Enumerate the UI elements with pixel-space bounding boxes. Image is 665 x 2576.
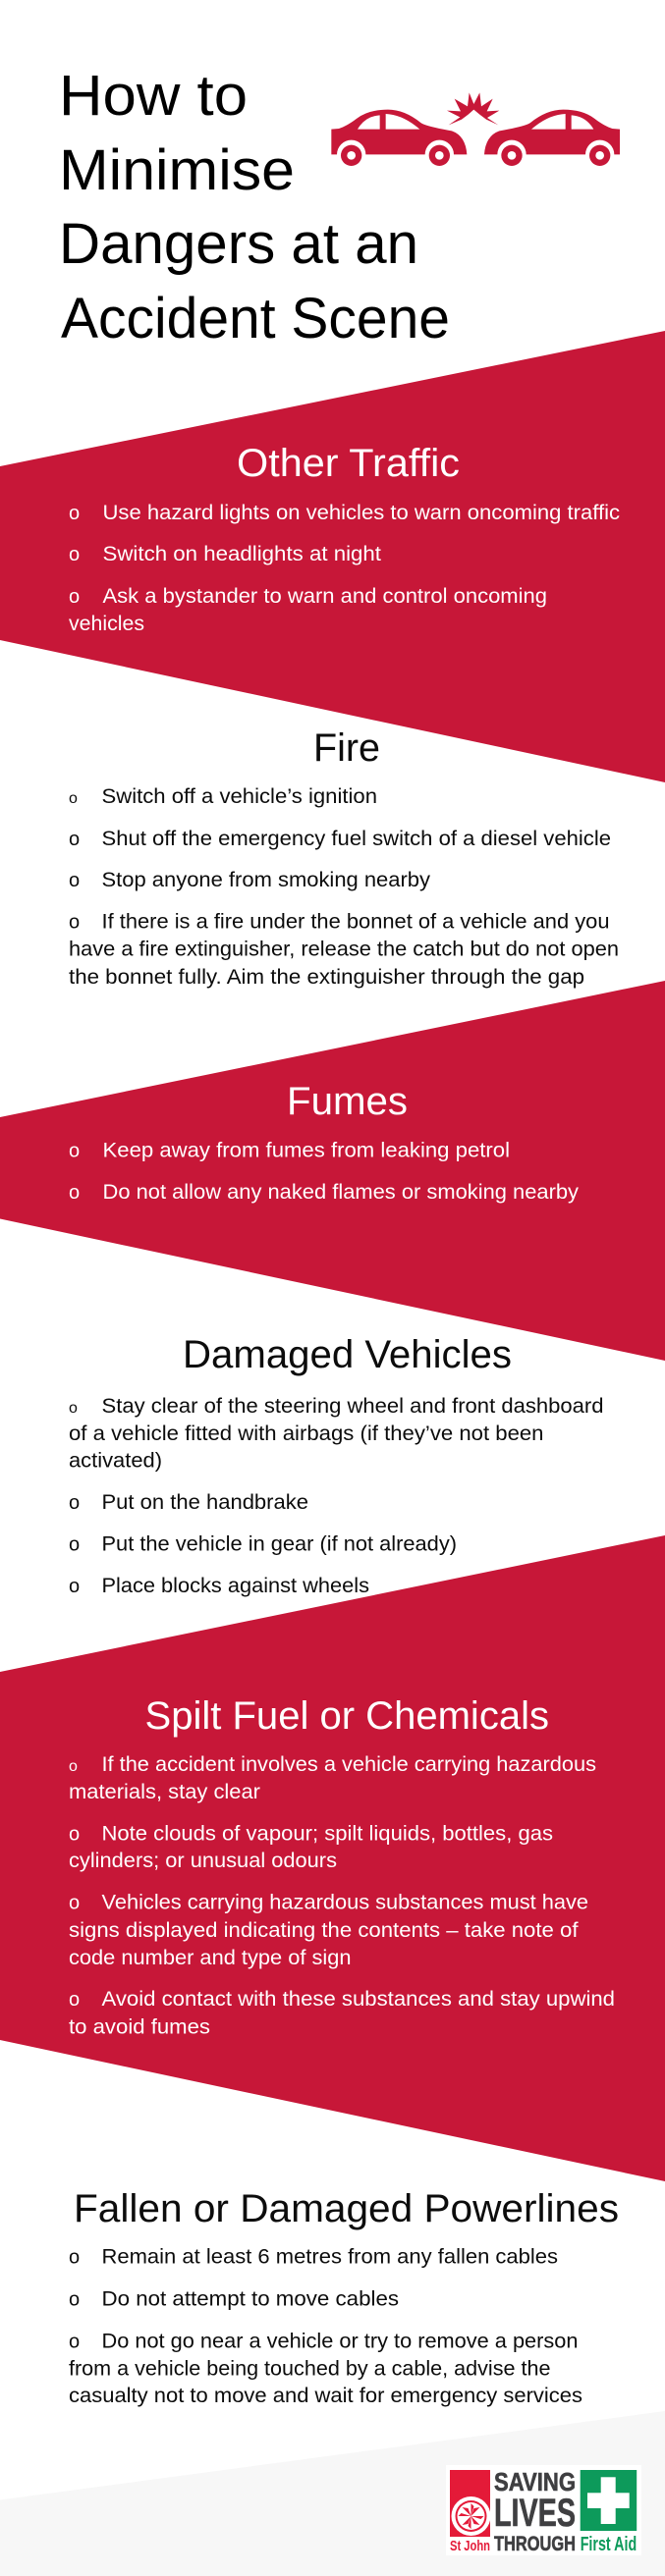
list item: Use hazard lights on vehicles to warn oncoming traffic [102,502,620,524]
list item: If the accident involves a vehicle carrying hazardous [102,1753,596,1776]
list item: o [69,1400,78,1417]
heading: fire: Fire [313,726,380,770]
title: Accident Scene [61,287,450,350]
icon: two cars colliding [331,92,620,166]
list item [69,911,619,989]
panel: fallen or damaged powerlines [69,2187,619,2407]
panel: fire [69,726,619,989]
footer band [0,2411,665,2576]
panel: fumes [0,981,665,1361]
list item: have a fire extinguisher, release the catch but do not open [69,939,619,960]
heading: fallen or damaged powerlines: Fallen or Damaged Powerlines [74,2187,619,2230]
list item: Switch off a vehicle’s ignition [102,785,377,808]
list item: o [69,829,80,850]
heading: damaged vehicles: Damaged Vehicles [183,1333,512,1376]
logo: st john emblem [450,2470,491,2537]
list item: o [69,911,80,933]
list item [69,1988,615,2038]
list item: Remain at least 6 metres from any fallen cables [102,2246,558,2268]
list item: o [69,2289,80,2311]
list item: Vehicles carrying hazardous substances must have [102,1891,588,1914]
logo: first aid cross [581,2470,637,2531]
list item: o [69,503,80,524]
heading: fumes: Fumes [287,1080,408,1123]
icon: left car [331,110,467,166]
list item: o [69,1492,80,1514]
title [59,64,450,350]
logo: tagline: LIVES [494,2492,576,2535]
list item: casualty not to move and wait for emergency services [69,2385,582,2407]
heading: other traffic: Other Traffic [237,442,460,485]
list item: Do not go near a vehicle or try to remove a person [102,2331,578,2352]
icon: right car [484,110,620,166]
list item: o [69,1893,80,1914]
list item: Stay clear of the steering wheel and front dashboard [102,1395,603,1418]
list item: materials, stay clear [69,1781,260,1803]
list item: o [69,544,80,565]
list item: If there is a fire under the bonnet of a vehicle and you [102,911,609,933]
logo: saving lives through first aid [446,2465,641,2555]
list item: activated) [69,1449,162,1473]
logo: tagline: THROUGH [494,2533,576,2555]
logo: first aid label: First Aid [581,2534,637,2555]
list item: o [69,790,78,807]
list item: o [69,1141,80,1162]
list item: Note clouds of vapour; spilt liquids, bottles, gas [102,1822,553,1846]
icon: impact burst [447,92,499,125]
list item: place blocks against wheels: o [69,1576,80,1597]
list item: Switch on headlights at night [102,543,381,565]
list item [69,1753,596,1803]
list item: Ask a bystander to warn and control oncoming [102,585,547,608]
list item: Do not attempt to move cables [102,2287,399,2311]
list item: cylinders; or unusual odours [69,1850,337,1872]
list item: o [69,2246,80,2268]
list item: o [69,1758,78,1775]
list item: o [69,1989,80,2011]
list item: o [69,586,80,608]
list item: Put the vehicle in gear (if not already) [102,1533,457,1555]
logo: tagline [494,2467,576,2555]
title: How to [59,64,248,128]
list item [69,1395,603,1473]
list item: o [69,1182,80,1204]
list item: o [69,1533,80,1555]
list item: place blocks against wheels: Place blocks against wheels [102,1575,369,1597]
list item: vehicles [69,613,144,635]
list item: o [69,870,80,891]
list item [69,1891,588,1969]
list item: o [69,2331,80,2352]
list item: from a vehicle being touched by a cable, advise the [69,2358,550,2380]
list item: Keep away from fumes from leaking petrol [102,1139,510,1162]
list item: Stop anyone from smoking nearby [102,869,431,891]
panel: damaged vehicles [69,1333,603,1555]
list item: Avoid contact with these substances and stay upwind [102,1988,615,2011]
list item [69,1822,553,1872]
list item [69,585,547,635]
list item: Do not allow any naked flames or smoking nearby [102,1181,580,1204]
list item: code number and type of sign [69,1947,352,1969]
list item: Shut off the emergency fuel switch of a diesel vehicle [102,828,611,850]
list item: o [69,1824,80,1846]
heading: spilt fuel or chemicals: Spilt Fuel or Chemicals [145,1694,549,1738]
logo: tagline: SAVING [494,2467,576,2496]
list item: to avoid fumes [69,2016,210,2038]
list item [69,2331,582,2407]
list item: Put on the handbrake [102,1491,308,1514]
logo: st john label: St John [450,2538,490,2554]
title: Dangers at an [59,212,418,276]
list item: of a vehicle fitted with airbags (if they’ve not been [69,1422,544,1445]
title: Minimise [59,138,295,202]
list item: the bonnet fully. Aim the extinguisher through the gap [69,966,584,989]
panel: spilt fuel or chemicals [0,1535,665,2181]
panel: other traffic [0,331,665,782]
list item: signs displayed indicating the contents – take note of [69,1919,579,1942]
